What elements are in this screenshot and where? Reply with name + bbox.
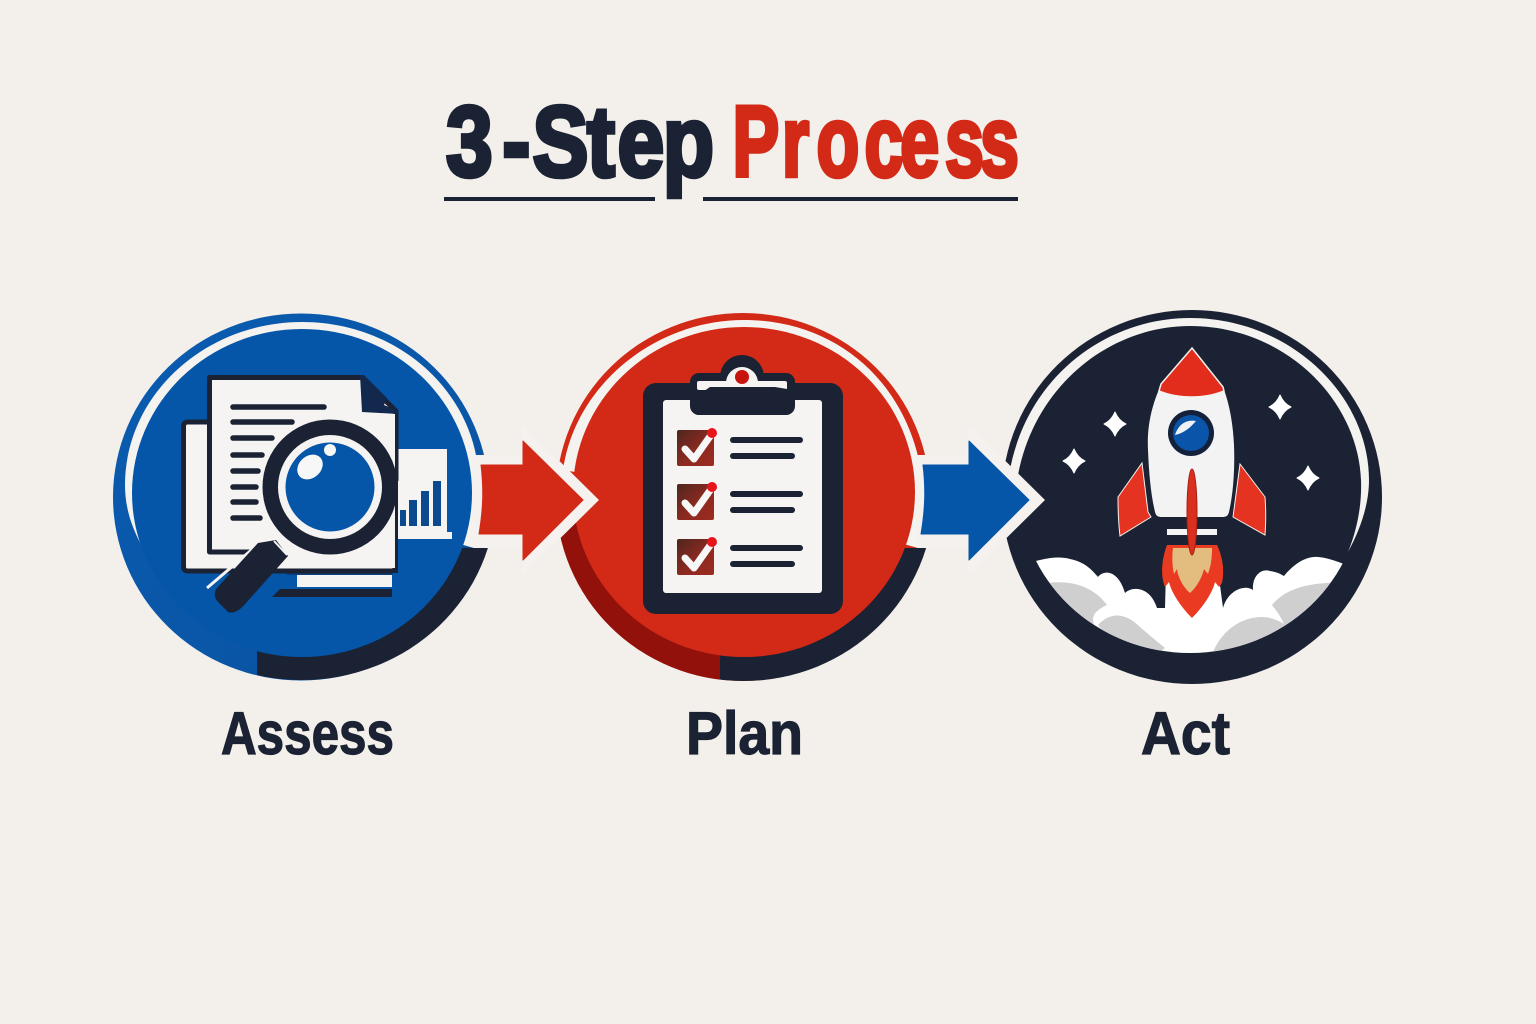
bar chart card (396, 449, 452, 539)
arrow outline (917, 425, 1045, 575)
title word: 3-Step: 3-Step (446, 85, 714, 198)
back page (184, 422, 396, 571)
rocket window (1168, 410, 1214, 456)
title underline (444, 197, 1018, 201)
outer dark ring (1002, 310, 1382, 684)
inner blue disc (132, 329, 472, 657)
label: Assess: Assess (221, 700, 394, 767)
centre fin (1187, 469, 1197, 555)
arrow body (921, 441, 1029, 560)
clipboard board (643, 383, 843, 614)
arrow outline (474, 425, 599, 575)
stars (1063, 395, 1319, 490)
step 2 circle: Plan (554, 309, 934, 681)
base bar (1167, 529, 1217, 535)
page fold (360, 375, 398, 414)
icon: rocket launch (1036, 347, 1342, 653)
checklist row 1 (677, 428, 800, 466)
exhaust flame (1162, 545, 1223, 618)
clip (690, 355, 795, 415)
outer blue ring (113, 314, 489, 680)
rocket nose (1159, 348, 1224, 397)
outer dark arc (720, 548, 926, 681)
grey cloud shading (1049, 582, 1330, 652)
lower page stack (272, 571, 392, 597)
right fin (1233, 464, 1266, 535)
arrow: Assess to Plan (474, 425, 599, 575)
left fin (1118, 463, 1151, 536)
checklist row 2 (677, 482, 800, 520)
icon: clipboard checklist (643, 355, 843, 614)
magnifier (207, 420, 398, 613)
outer red ring (556, 313, 930, 681)
icon: documents with magnifier and chart (184, 375, 452, 613)
white crescent (125, 322, 479, 548)
text lines (233, 407, 324, 518)
step 1 circle: Assess (108, 310, 496, 680)
outer dark arc (257, 548, 488, 680)
arrow: Plan to Act (917, 425, 1045, 575)
smoke clouds (1036, 556, 1342, 653)
label: Plan: Plan (686, 700, 803, 767)
arrow body (479, 441, 583, 560)
front page (210, 378, 396, 552)
white crescent (1009, 318, 1369, 552)
title word: Process: Process (732, 87, 1019, 198)
paper (663, 400, 822, 593)
rocket body (1148, 387, 1234, 517)
step 3 circle: Act (1002, 310, 1382, 684)
outer dark red arc (560, 522, 720, 680)
label: Act: Act (1141, 700, 1230, 767)
white crescent (563, 320, 922, 548)
checklist row 3 (677, 537, 800, 575)
title (444, 85, 1019, 201)
inner red disc (573, 327, 915, 657)
